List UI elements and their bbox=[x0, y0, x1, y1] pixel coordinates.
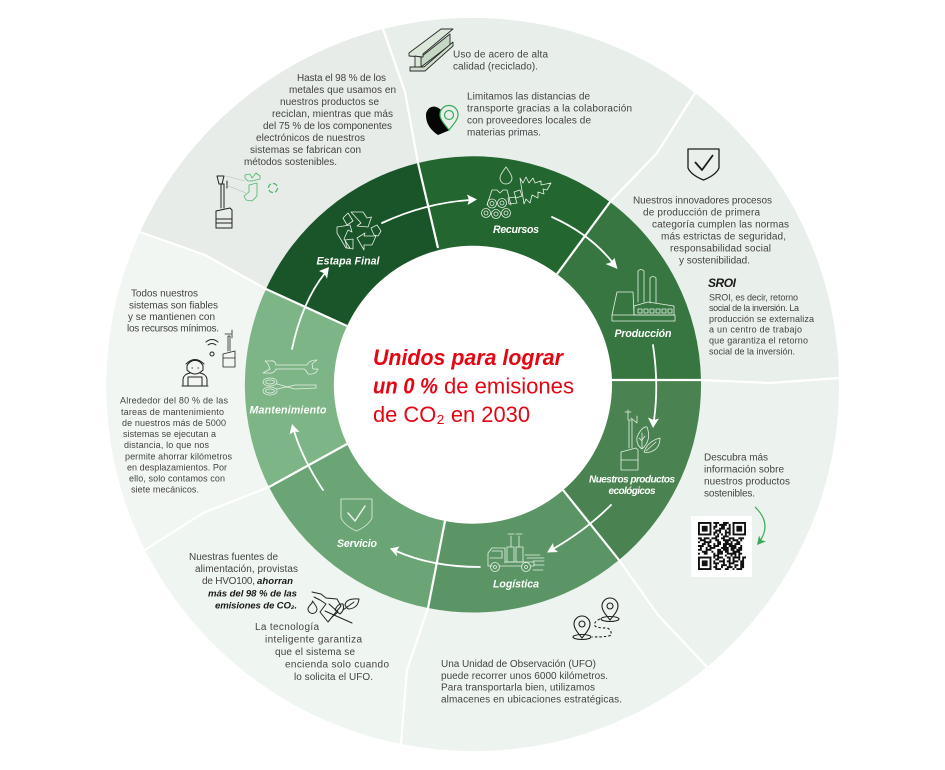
text: recycling of metals: métodos sostenibles. bbox=[244, 157, 337, 168]
text: discover more: sostenibles. bbox=[704, 488, 755, 500]
text: remote maintenance: sistemas se ejecutan a bbox=[123, 429, 216, 439]
text: SROI: social de la inversión. bbox=[709, 346, 795, 356]
panel: mantenimiento background bbox=[106, 232, 269, 550]
panel: productos ecológicos background bbox=[619, 378, 839, 667]
text: recycling of metals: reciclan, mientras que más bbox=[272, 109, 393, 120]
text: transport distances: Limitamos las distancias de bbox=[467, 92, 590, 102]
text: discover more: nuestros productos bbox=[704, 476, 790, 488]
text: transport distances: con proveedores locales de bbox=[467, 116, 591, 126]
text: remote maintenance: de nuestros más de 5000 bbox=[122, 418, 226, 428]
text: power sources: ahorran bbox=[257, 576, 293, 587]
icon: station exploded into recycled parts bbox=[216, 173, 278, 228]
stage labels: Nuestros productos bbox=[589, 474, 675, 486]
text: power sources: Nuestras fuentes de bbox=[189, 552, 278, 563]
text: smart technology: La tecnología bbox=[255, 622, 319, 633]
panel: servicio background bbox=[145, 487, 428, 744]
text: recycling of metals: del 75 % de los componentes bbox=[263, 121, 392, 132]
text: SROI: social de la inversión. La bbox=[709, 303, 799, 313]
text: production processes: de producción de primera bbox=[643, 208, 760, 218]
text: SROI: SROI, es decir, retorno bbox=[709, 292, 798, 302]
text: recycling of metals: electrónicos de nuestros bbox=[256, 133, 365, 144]
arrow: producción to productos bbox=[648, 345, 659, 428]
stage labels: Recursos bbox=[493, 224, 539, 236]
icon: technician with laptop and station bbox=[182, 330, 235, 386]
outer ring of text panels bbox=[106, 18, 839, 751]
title: de CO₂ en 2030 bbox=[373, 402, 530, 427]
panel: recursos background bbox=[383, 18, 695, 202]
icon: recycle bbox=[337, 212, 381, 250]
text: smart technology: lo solicita el UFO. bbox=[294, 672, 373, 683]
icon: factory bbox=[612, 270, 675, 321]
icon: route with pins bbox=[573, 598, 619, 640]
text: recycling of metals: nuestros productos se bbox=[280, 97, 379, 108]
text: remote maintenance: siete mecánicos. bbox=[131, 484, 199, 494]
text: power sources: de HVO100, bbox=[202, 576, 255, 587]
text: smart technology: encienda solo cuando bbox=[285, 660, 389, 670]
text: remote maintenance: distancia, lo que nos bbox=[124, 440, 210, 450]
arrow: mantenimiento to estapa final bbox=[292, 267, 329, 349]
text: production processes: y sostenibilidad. bbox=[679, 256, 750, 266]
text: recycling of metals: Hasta el 98 % de los bbox=[297, 73, 386, 84]
text: smart technology bbox=[255, 622, 389, 683]
text: production processes: más estrictas de seguridad, bbox=[661, 232, 786, 242]
text: discover more: información sobre bbox=[704, 464, 784, 476]
text: transport distances bbox=[467, 92, 632, 138]
text: remote maintenance: ello, solo contamos con bbox=[129, 474, 225, 484]
segment: mantenimiento bbox=[245, 289, 347, 487]
text: discover more: Descubra más bbox=[704, 452, 768, 464]
text: reliable systems: los recursos mínimos. bbox=[127, 324, 219, 334]
text: smart technology: que el sistema se bbox=[275, 647, 355, 658]
text: remote maintenance: tareas de mantenimiento bbox=[121, 407, 224, 417]
text: power sources: más del 98 % de las bbox=[208, 588, 297, 600]
text: SROI: a un centro de trabajo bbox=[709, 324, 802, 334]
arrow: servicio to mantenimiento bbox=[290, 424, 323, 490]
arrow: logística to servicio bbox=[390, 546, 480, 567]
text: reliable systems: y se mantienen con bbox=[128, 312, 215, 323]
text: power sources: emisiones de CO₂. bbox=[215, 600, 297, 612]
text: production processes: Nuestros innovadores procesos bbox=[633, 196, 772, 206]
text: reliable systems: Todos nuestros bbox=[131, 288, 198, 300]
title: un 0 % bbox=[373, 374, 438, 398]
text: unidad de observación: Una Unidad de Observación (UFO) bbox=[441, 659, 596, 670]
segment: logística bbox=[428, 490, 619, 613]
icon: shield with check service bbox=[341, 499, 372, 531]
panel: logística background bbox=[401, 560, 707, 751]
icon: steel beam bbox=[409, 29, 453, 71]
text: steel: calidad (reciclado). bbox=[453, 62, 538, 72]
middle ring of lifecycle stages bbox=[245, 156, 701, 613]
text: SROI: SROI bbox=[708, 276, 737, 290]
text: recycling of metals: sistemas se fabrican con bbox=[250, 145, 361, 156]
icon: resources logs tree and drop bbox=[482, 167, 551, 218]
icon: truck bbox=[488, 534, 544, 572]
text: remote maintenance: Alrededor del 80 % de las bbox=[120, 396, 228, 406]
text: power sources bbox=[189, 552, 298, 612]
segment: recursos bbox=[418, 156, 610, 274]
text: transport distances: materias primas. bbox=[467, 128, 541, 138]
stage labels: Estapa Final bbox=[316, 256, 381, 268]
icon: station with leaves bbox=[621, 410, 660, 470]
text: recycling of metals: metales que usamos en bbox=[289, 85, 396, 96]
icon: fuel nozzle with leaf bbox=[308, 592, 359, 623]
panel: estapa final background bbox=[140, 29, 418, 289]
arrow: productos to logística bbox=[547, 505, 611, 552]
segment: producción bbox=[557, 202, 701, 380]
text: unidad de observación bbox=[441, 659, 622, 706]
segment: estapa final bbox=[266, 163, 439, 326]
arrow: recursos to producción bbox=[552, 217, 618, 269]
arrow: estapa final to recursos bbox=[382, 194, 477, 223]
text: remote maintenance: en desplazamientos. Por bbox=[127, 462, 227, 472]
text: transport distances: transporte gracias a la colaboración bbox=[467, 104, 632, 114]
segment: servicio bbox=[269, 444, 445, 608]
arrow: green to QR code bbox=[755, 507, 766, 545]
text: reliable systems: sistemas son fiables bbox=[129, 300, 218, 312]
stage labels bbox=[250, 224, 675, 590]
text: reliable systems bbox=[127, 288, 219, 334]
stage labels: Producción bbox=[614, 328, 672, 340]
cycle arrows bbox=[290, 194, 659, 567]
text: production processes: categoría cumplen las normas bbox=[652, 220, 789, 230]
text: smart technology: inteligente garantiza bbox=[265, 634, 362, 646]
text: steel: Uso de acero de alta bbox=[453, 50, 548, 60]
text: remote maintenance bbox=[120, 396, 232, 494]
stage labels: Mantenimiento bbox=[250, 404, 327, 416]
text: power sources: alimentación, provistas bbox=[195, 564, 298, 575]
center circle bbox=[334, 246, 612, 524]
text: production processes: responsabilidad social bbox=[670, 244, 771, 254]
title: de emisiones bbox=[444, 374, 574, 398]
text: SROI bbox=[708, 276, 814, 356]
text: discover more bbox=[704, 452, 790, 500]
segment: nuestros productos ecológicos bbox=[563, 380, 701, 560]
text: SROI: producción se externaliza bbox=[709, 314, 814, 324]
icon: heart with pin bbox=[426, 105, 458, 135]
text: unidad de observación: Para transportarla bien, utilizamos bbox=[441, 682, 595, 694]
title bbox=[373, 345, 574, 427]
panel: producción background bbox=[610, 93, 839, 383]
stage labels: Logística bbox=[493, 578, 539, 590]
QR code bbox=[691, 516, 752, 577]
text: steel bbox=[453, 50, 548, 72]
icon: wrench and scissors bbox=[263, 360, 318, 395]
title: Unidos para lograr bbox=[373, 345, 564, 370]
icon: dark shield with check bbox=[688, 149, 719, 180]
text: unidad de observación: puede recorrer unos 6000 kilómetros. bbox=[441, 671, 608, 682]
text: production processes bbox=[633, 196, 789, 266]
text: SROI: que garantiza el retorno bbox=[709, 336, 808, 346]
text: remote maintenance: permite ahorrar kilómetros bbox=[125, 452, 232, 462]
text: unidad de observación: almacenes en ubicaciones estratégicas. bbox=[441, 694, 622, 706]
stage labels: Servicio bbox=[337, 538, 378, 550]
stage labels: ecológicos bbox=[608, 486, 656, 497]
text: recycling of metals bbox=[244, 73, 396, 168]
